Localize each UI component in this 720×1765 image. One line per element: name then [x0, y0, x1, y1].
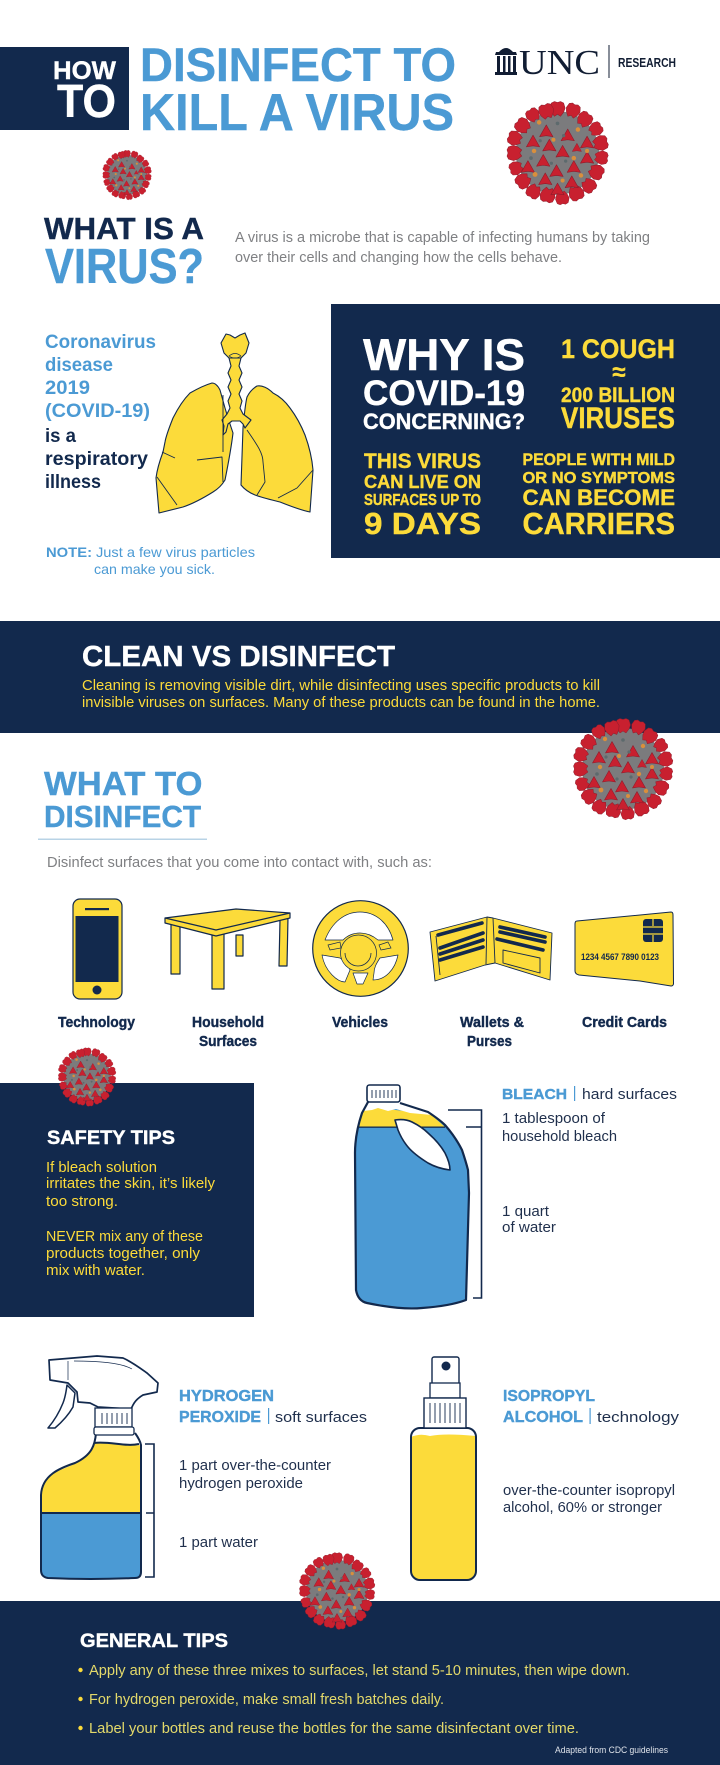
stat: cough: VIRUSES — [561, 402, 675, 435]
note — [46, 544, 255, 577]
label: isopropyl alcohol: technology — [597, 1410, 680, 1426]
virus: over general tips — [298, 1553, 376, 1630]
heading: what is a virus: VIRUS? — [45, 240, 204, 294]
note: Just a few virus particles — [96, 544, 255, 560]
label: isopropyl alcohol: over-the-counter isopropyl — [503, 1483, 675, 1499]
stat: 9 days: CAN LIVE ON — [364, 472, 481, 492]
label: hydrogen peroxide: HYDROGEN — [179, 1388, 274, 1405]
heading: why is covid-19 concerning: COVID-19 — [363, 374, 525, 413]
heading: why is covid-19 concerning: WHY IS — [363, 331, 525, 380]
tip list: Label your bottles and reuse the bottles for the same disinfectant over time. — [89, 1721, 579, 1737]
virus: small above heading — [102, 150, 152, 200]
heading: why is covid-19 concerning: CONCERNING? — [363, 409, 525, 434]
respiratory illness statement: illness — [45, 472, 101, 493]
item: credit cards — [575, 912, 674, 1031]
virus: over safety tips — [58, 1048, 117, 1107]
stat: carriers: PEOPLE WITH MILD — [522, 451, 675, 469]
panel: safety tips: SAFETY TIPS — [47, 1127, 175, 1149]
label: hydrogen peroxide: PEROXIDE — [179, 1409, 261, 1426]
respiratory illness statement: (COVID-19) — [45, 401, 150, 422]
item: vehicles — [313, 901, 408, 1031]
respiratory illness statement: 2019 — [45, 378, 90, 399]
bottle: isopropyl alcohol spray — [411, 1357, 476, 1580]
heading: why is covid-19 concerning — [363, 331, 525, 434]
stat: cough: 1 COUGH — [561, 334, 675, 364]
stat: cough — [561, 334, 675, 435]
UNC Research logo: RESEARCH — [618, 55, 676, 70]
tip list: Apply any of these three mixes to surfaces, let stand 5-10 minutes, then wipe down. — [89, 1663, 630, 1679]
panel: safety tips: products together, only — [46, 1246, 201, 1262]
virus definition text — [235, 230, 650, 266]
respiratory illness statement: is a — [45, 426, 76, 447]
panel: clean vs disinfect: Cleaning is removing visible dirt, while disinfecting uses specific products to kill — [82, 678, 600, 694]
panel: why is covid-19 concerning — [331, 304, 720, 558]
stat: 9 days: SURFACES UP TO — [364, 492, 481, 509]
heading: what to disinfect: DISINFECT — [44, 799, 201, 834]
UNC Research logo: UNC — [519, 43, 600, 82]
respiratory illness statement — [45, 332, 156, 493]
label: bleach: 1 tablespoon of — [502, 1111, 606, 1127]
bottle: hydrogen peroxide spray — [41, 1356, 158, 1579]
panel: safety tips: too strong. — [46, 1194, 118, 1210]
tip list: For hydrogen peroxide, make small fresh batches daily. — [89, 1692, 444, 1708]
stat: carriers: CAN BECOME — [522, 485, 675, 510]
note: can make you sick. — [94, 561, 215, 577]
item: technology — [58, 899, 135, 1031]
measuring bracket — [448, 1110, 482, 1298]
item: household surfaces — [165, 909, 290, 1050]
item: household surfaces: Household — [192, 1015, 264, 1031]
how to box — [0, 47, 129, 130]
stat: carriers: CARRIERS — [522, 507, 675, 541]
respiratory illness statement: Coronavirus — [45, 332, 156, 353]
virus: right of what to disinfect — [572, 718, 674, 820]
label: bleach: of water — [502, 1220, 556, 1236]
label: hydrogen peroxide: 1 part over-the-counter — [179, 1458, 331, 1474]
label: bleach — [502, 1086, 677, 1236]
label: bleach: hard surfaces — [582, 1087, 677, 1103]
note: NOTE: — [46, 544, 92, 560]
label: isopropyl alcohol: ALCOHOL — [503, 1409, 583, 1426]
UNC Research logo — [495, 43, 676, 82]
label: bleach: 1 quart — [502, 1204, 549, 1220]
panel: clean vs disinfect: invisible viruses on surfaces. Many of these products can be found in the home. — [82, 695, 600, 711]
panel: general tips: GENERAL TIPS — [80, 1630, 228, 1652]
virus: large top right — [506, 101, 609, 205]
item: technology: Technology — [58, 1015, 135, 1031]
virus definition text: over their cells and changing how the cells behave. — [235, 250, 562, 266]
item: vehicles: Vehicles — [332, 1015, 388, 1031]
main title: DISINFECT TO — [140, 39, 456, 92]
main title: KILL A VIRUS — [140, 83, 454, 141]
stat: 9 days — [364, 450, 481, 541]
label: hydrogen peroxide: hydrogen peroxide — [179, 1476, 303, 1492]
panel: clean vs disinfect: CLEAN VS DISINFECT — [82, 641, 395, 673]
heading: what to disinfect: WHAT TO — [44, 766, 202, 803]
title banner — [0, 39, 456, 141]
label: hydrogen peroxide: 1 part water — [179, 1535, 258, 1551]
panel: safety tips: If bleach solution — [46, 1160, 157, 1176]
panel: safety tips: NEVER mix any of these — [46, 1229, 203, 1245]
respiratory illness statement: respiratory — [45, 449, 148, 470]
item: wallets and purses — [430, 917, 552, 1050]
heading: what to disinfect — [38, 766, 207, 840]
label: isopropyl alcohol: ISOPROPYL — [503, 1388, 595, 1405]
panel: safety tips: mix with water. — [46, 1263, 145, 1279]
tip list — [78, 1663, 630, 1737]
label: isopropyl alcohol: alcohol, 60% or stronger — [503, 1500, 662, 1516]
stat: carriers — [522, 451, 675, 541]
how to box: HOW — [53, 57, 116, 85]
panel: safety tips — [0, 1083, 254, 1317]
stat: 9 days: 9 DAYS — [364, 507, 481, 541]
source note: Adapted from CDC guidelines — [555, 1745, 668, 1755]
virus definition text: A virus is a microbe that is capable of infecting humans by taking — [235, 230, 650, 246]
item: household surfaces: Surfaces — [199, 1034, 257, 1050]
label: isopropyl alcohol — [503, 1388, 680, 1516]
panel: safety tips: irritates the skin, it’s likely — [46, 1176, 216, 1192]
intro text: Disinfect surfaces that you come into contact with, such as: — [47, 855, 432, 871]
how to box: TO — [57, 75, 116, 127]
label: hydrogen peroxide — [179, 1388, 367, 1551]
label: hydrogen peroxide: soft surfaces — [275, 1410, 367, 1426]
stat: carriers: OR NO SYMPTOMS — [522, 470, 675, 487]
item: credit cards: 1234 4567 7890 0123 — [581, 952, 659, 962]
panel: clean vs disinfect — [0, 621, 720, 733]
panel: general tips — [0, 1601, 720, 1765]
stat: 9 days: THIS VIRUS — [364, 450, 481, 473]
stat: cough: ≈ — [612, 359, 626, 386]
item: wallets and purses: Purses — [467, 1034, 512, 1050]
item: wallets and purses: Wallets & — [460, 1015, 525, 1031]
bottle: bleach — [355, 1085, 482, 1308]
heading: what is a virus: WHAT IS A — [44, 211, 204, 246]
main title — [140, 39, 456, 141]
measuring bracket — [145, 1444, 154, 1577]
label: bleach: household bleach — [502, 1129, 617, 1145]
stat: cough: 200 BILLION — [561, 384, 675, 407]
heading: what is a virus — [44, 211, 204, 294]
respiratory illness statement: disease — [45, 355, 113, 376]
icon: lungs — [156, 333, 313, 513]
item: credit cards: Credit Cards — [582, 1015, 667, 1031]
label: bleach: BLEACH — [502, 1086, 567, 1103]
